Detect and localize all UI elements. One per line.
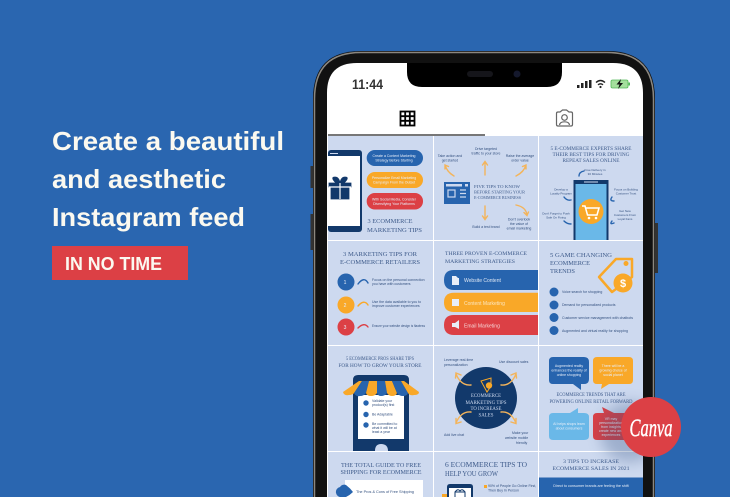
post 9: ecommerce trends: social planet bbox=[603, 373, 623, 377]
post 3: expert tips: Customers From bbox=[614, 213, 637, 217]
post 1: marketing tips: Strategy Before Starting bbox=[375, 158, 413, 162]
post 3: expert tips: 30 Minutes bbox=[588, 172, 603, 176]
post 6: game changing trends: Demand for personalized products bbox=[562, 303, 616, 307]
post 1: marketing tips: With Social Media, Consider bbox=[372, 198, 417, 202]
post 2: tips to know: Take action and bbox=[438, 154, 462, 158]
post 1: marketing tips: Create a Content Marketing bbox=[372, 154, 416, 158]
post 3: expert tips: Don't Forget to Push bbox=[542, 212, 570, 216]
headline bbox=[52, 126, 284, 232]
post 3: expert tips: Loyal Fans bbox=[618, 217, 633, 221]
post 8: tips to increase sales: personalization bbox=[444, 363, 468, 367]
post 2: tips to know: get started bbox=[442, 158, 458, 162]
post 4: marketing tips for retailers: Ensure your website design is flawless bbox=[372, 324, 425, 328]
post 4: marketing tips for retailers: Use the data available to you to bbox=[372, 300, 421, 304]
feed grid bbox=[328, 136, 660, 497]
post 7: grow your store: product(s) first bbox=[372, 403, 394, 407]
post 1: marketing tips: 3 ECOMMERCE bbox=[368, 219, 413, 225]
badge: in no time: IN NO TIME bbox=[65, 254, 162, 274]
post 12: tips to increase sales 2021: Direct to consumer brands are feeling the shift bbox=[553, 484, 629, 488]
post 8: tips to increase sales bbox=[434, 346, 538, 451]
post 9: ecommerce trends: personalization bbox=[599, 421, 623, 425]
post 5: marketing strategies: MARKETING STRATEGIES bbox=[445, 259, 515, 265]
headline: Create a beautiful bbox=[52, 126, 284, 156]
post 2: tips to know: E-COMMERCE BUSINESS bbox=[474, 195, 522, 200]
post 1: marketing tips bbox=[328, 136, 433, 240]
post 9: ecommerce trends: growing choice of bbox=[599, 368, 627, 372]
post 2: tips to know: order value bbox=[511, 158, 529, 162]
post 4: marketing tips for retailers: you have with customers bbox=[372, 282, 411, 286]
post 5: marketing strategies: Content Marketing bbox=[464, 301, 505, 307]
post 9: ecommerce trends: AI helps shops learn bbox=[553, 422, 585, 426]
post 7: grow your store: FOR HOW TO GROW YOUR STORE bbox=[338, 364, 422, 369]
post 8: tips to increase sales: Leverage real-time bbox=[444, 358, 473, 362]
post 9: ecommerce trends: POWERING ONLINE RETAIL FORWARD bbox=[550, 400, 633, 405]
post 8: tips to increase sales: ECOMMERCE bbox=[471, 394, 501, 399]
post 5: marketing strategies: THREE PROVEN E-COMMERCE bbox=[445, 251, 528, 257]
post 10: free shipping guide: THE TOTAL GUIDE TO FREE bbox=[341, 463, 421, 469]
post 8: tips to increase sales: friendly bbox=[516, 441, 528, 445]
post 6: game changing trends: Customer service management with chatbots bbox=[562, 316, 633, 320]
post 9: ecommerce trends: from insights bbox=[601, 425, 621, 429]
post 4: marketing tips for retailers bbox=[328, 241, 433, 345]
post 6: game changing trends: Augmented and virtual reality for shopping bbox=[562, 329, 628, 333]
post 2: tips to know: Don't overlook bbox=[508, 218, 530, 222]
post 2: tips to know: BEFORE STARTING YOUR bbox=[474, 190, 525, 194]
post 8: tips to increase sales: Add live chat bbox=[444, 433, 464, 437]
post 12: tips to increase sales 2021: 3 TIPS TO INCREASE bbox=[563, 459, 620, 465]
post 8: tips to increase sales: Use discount sales bbox=[499, 360, 529, 364]
tab: tagged icon bbox=[556, 110, 572, 126]
post 4: marketing tips for retailers: E-COMMERCE RETAILERS bbox=[340, 260, 420, 266]
post 1: marketing tips: Personalize Email Marketing bbox=[372, 176, 416, 180]
post 3: expert tips: REPEAT SALES ONLINE bbox=[562, 159, 620, 164]
post 4: marketing tips for retailers: 2 bbox=[344, 303, 347, 309]
badge shadow bbox=[600, 402, 660, 462]
post 3: expert tips: Free Delivery in bbox=[584, 168, 606, 172]
post 6: game changing trends: ECOMMERCE bbox=[550, 260, 590, 267]
post 2: tips to know: traffic to your store bbox=[472, 152, 501, 156]
post 11: tips to help you grow: Then Buy In Person bbox=[488, 488, 519, 492]
post 8: tips to increase sales: Make your bbox=[512, 431, 529, 435]
post 4: marketing tips for retailers: 3 bbox=[344, 325, 347, 331]
headline: and aesthetic bbox=[52, 164, 226, 194]
post 7: grow your store bbox=[328, 346, 433, 451]
post 9: ecommerce trends: VR may bbox=[605, 417, 617, 421]
tab: grid icon bbox=[400, 112, 414, 126]
post 9: ecommerce trends: online shopping bbox=[557, 373, 581, 377]
post 7: grow your store: what it will be at bbox=[372, 426, 397, 430]
badge: in no time bbox=[52, 246, 188, 280]
headline: Instagram feed bbox=[52, 202, 245, 232]
post 3: expert tips: Loyalty Program bbox=[550, 192, 572, 196]
post 7: grow your store: 5 ECOMMERCE PROS SHARE TIPS bbox=[346, 357, 414, 362]
post 3: expert tips: Get New bbox=[619, 209, 632, 213]
post 3: expert tips: Sale On Fixing bbox=[546, 216, 566, 220]
active tab underline bbox=[328, 134, 485, 136]
post 10: free shipping guide bbox=[328, 452, 433, 497]
post 2: tips to know: Drive targeted bbox=[475, 147, 497, 151]
post 9: ecommerce trends bbox=[539, 346, 643, 451]
post 2: tips to know: FIVE TIPS TO KNOW bbox=[474, 184, 521, 189]
post 9: ecommerce trends: create new and bbox=[599, 429, 623, 433]
post 1: marketing tips: MARKETING TIPS bbox=[367, 228, 422, 234]
post 3: expert tips: THEIR BEST TIPS FOR DRIVING bbox=[552, 153, 630, 158]
post 1: marketing tips: Campaign From the Outset bbox=[373, 180, 415, 184]
post 6: game changing trends: TRENDS bbox=[550, 268, 576, 275]
post 10: free shipping guide: SHIPPING FOR ECOMMERCE bbox=[340, 470, 422, 476]
post 9: ecommerce trends: Augmented reality bbox=[555, 364, 583, 368]
post 9: ecommerce trends: ECOMMERCE TRENDS THAT ARE bbox=[556, 393, 626, 398]
post 2: tips to know: email marketing bbox=[507, 226, 531, 230]
post 9: ecommerce trends: experiences bbox=[602, 433, 621, 437]
post 10: free shipping guide: The Pros & Cons of Free Shipping bbox=[356, 490, 414, 494]
post 9: ecommerce trends: There will be a bbox=[602, 364, 624, 368]
post 12: tips to increase sales 2021 bbox=[539, 452, 643, 497]
post 4: marketing tips for retailers: Focus on the personal connection bbox=[372, 278, 425, 282]
post 4: marketing tips for retailers: 3 MARKETING TIPS FOR bbox=[343, 252, 417, 258]
post 5: marketing strategies bbox=[434, 241, 538, 345]
phone frame bbox=[310, 51, 658, 497]
post 8: tips to increase sales: website mobile bbox=[505, 436, 528, 440]
post 7: grow your store: least a year bbox=[372, 430, 391, 434]
post 9: ecommerce trends: enhances the reality of bbox=[551, 368, 587, 372]
post 6: game changing trends: 5 GAME CHANGING bbox=[550, 252, 613, 259]
notch bbox=[407, 63, 562, 87]
post 11: tips to help you grow bbox=[434, 452, 538, 497]
status time: 11:44 bbox=[352, 77, 383, 92]
canva badge: Canva bbox=[630, 415, 672, 442]
post 6: game changing trends bbox=[539, 241, 643, 345]
post 3: expert tips: Focus on Building bbox=[614, 188, 638, 192]
post 11: tips to help you grow: 90% of People Go Online First, bbox=[488, 484, 536, 488]
post 11: tips to help you grow: 6 ECOMMERCE TIPS TO bbox=[445, 461, 527, 469]
post 7: grow your store: Validate your bbox=[372, 399, 393, 403]
post 2: tips to know: the value of bbox=[510, 222, 528, 226]
post 4: marketing tips for retailers: improve customer experiences bbox=[372, 304, 420, 308]
status icons bbox=[577, 79, 630, 89]
post 7: grow your store: Be committed to bbox=[372, 422, 397, 426]
post 4: marketing tips for retailers: 1 bbox=[344, 280, 347, 286]
post 5: marketing strategies: Website Content bbox=[464, 278, 501, 284]
post 3: expert tips: Customer Trust bbox=[616, 192, 636, 196]
post 8: tips to increase sales: SALES bbox=[478, 414, 494, 418]
post 1: marketing tips: Diversifying Your Platforms bbox=[373, 202, 415, 206]
post 8: tips to increase sales: TO INCREASE bbox=[470, 407, 502, 412]
post 2: tips to know: Raise the average bbox=[506, 154, 534, 158]
post 12: tips to increase sales 2021: ECOMMERCE SALES IN 2021 bbox=[552, 466, 630, 472]
post 11: tips to help you grow: HELP YOU GROW bbox=[445, 470, 498, 478]
canva badge bbox=[621, 397, 681, 457]
post 8: tips to increase sales: MARKETING TIPS bbox=[466, 401, 507, 406]
post 2: tips to know bbox=[434, 136, 538, 240]
post 9: ecommerce trends: about consumers bbox=[556, 426, 583, 430]
post 6: game changing trends: $ bbox=[620, 278, 626, 290]
post 7: grow your store: Be Adaptable bbox=[372, 412, 393, 416]
post 3: expert tips bbox=[539, 136, 643, 240]
post 6: game changing trends: Voice search for shopping bbox=[562, 290, 602, 294]
post 5: marketing strategies: Email Marketing bbox=[464, 324, 500, 330]
post 3: expert tips: Develop a bbox=[554, 188, 568, 192]
post 2: tips to know: Build a test brand bbox=[472, 225, 500, 229]
post 3: expert tips: 5 E-COMMERCE EXPERTS SHARE bbox=[550, 147, 632, 152]
